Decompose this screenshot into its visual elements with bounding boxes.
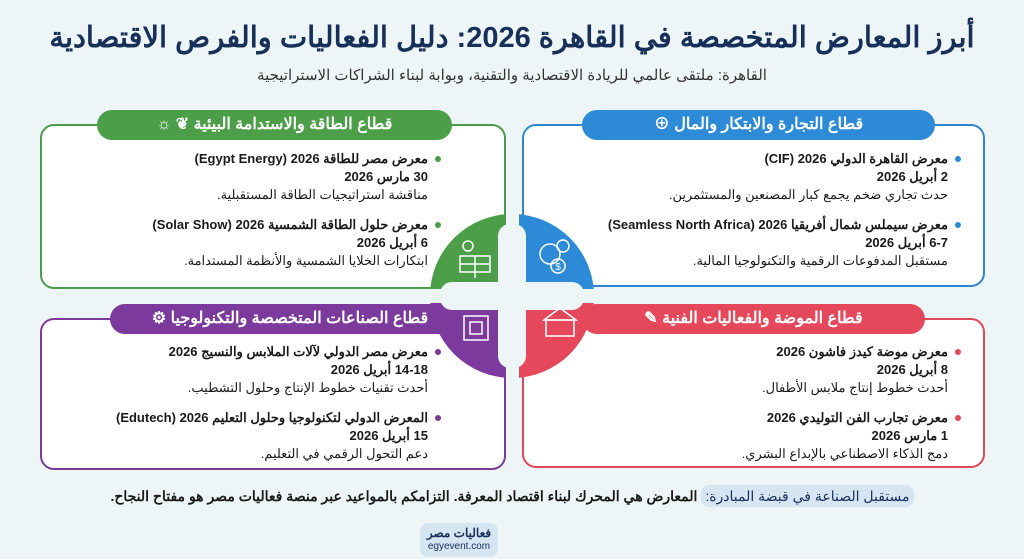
text: energy items: معرض مصر للطاقة 2026 (Egypt Energy) <box>195 151 428 166</box>
heading: fashion: قطاع الموضة والفعاليات الفنية ✎ <box>644 310 863 327</box>
panel: fashion (red) <box>522 318 985 468</box>
text: energy items <box>152 151 441 268</box>
panel: energy (green) <box>40 124 506 289</box>
text: industries items: معرض مصر الدولي لآلات الملابس والنسيج 2026 <box>169 344 428 359</box>
heading: industries <box>110 304 470 334</box>
text: fashion items <box>742 344 961 462</box>
text: industries items: 14-18 أبريل 2026 <box>331 362 428 377</box>
footer text: مستقبل الصناعة في قبضة المبادرة: المعارض هي المحرك لبناء اقتصاد المعرفة. التزامكم بالمواعيد عبر منصة فعاليات مصر هو مفتاح النجاح. <box>110 488 910 504</box>
text: trade items: حدث تجاري ضخم يجمع كبار المصنعين والمستثمرين. <box>669 187 948 202</box>
heading: energy: قطاع الطاقة والاستدامة البيئية ❦ ☼ <box>157 116 392 133</box>
text: trade items: 6-7 أبريل 2026 <box>865 235 948 250</box>
heading: industries: قطاع الصناعات المتخصصة والتكنولوجيا ⚙ <box>152 310 428 327</box>
text: industries items: دعم التحول الرقمي في التعليم. <box>261 446 428 461</box>
panel: trade (blue) <box>522 124 985 287</box>
icon: gears dollar <box>540 240 569 273</box>
text: energy items: ابتكارات الخلايا الشمسية والأنظمة المستدامة. <box>184 253 428 268</box>
title: أبرز المعارض المتخصصة في القاهرة 2026: دليل الفعاليات والفرص الاقتصادية <box>49 22 975 54</box>
panel: industries (purple) <box>40 318 506 470</box>
chart: center quadrant wheel <box>430 214 594 378</box>
text: fashion items: أحدث خطوط إنتاج ملابس الأطفال. <box>762 380 948 395</box>
text: energy items: مناقشة استراتيجيات الطاقة المستقبلية. <box>217 187 428 202</box>
text: energy items: معرض حلول الطاقة الشمسية 2026 (Solar Show) <box>152 217 428 232</box>
heading: trade: قطاع التجارة والابتكار والمال ⊕ <box>654 116 863 133</box>
heading: energy <box>97 110 452 140</box>
text: industries items <box>116 344 441 462</box>
text: fashion items: 8 أبريل 2026 <box>877 362 948 377</box>
heading: trade <box>582 110 935 140</box>
text: industries items: 15 أبريل 2026 <box>350 428 428 443</box>
text: trade items: 2 أبريل 2026 <box>877 169 948 184</box>
text: energy items: 6 أبريل 2026 <box>357 235 428 250</box>
text: fashion items: معرض موضة كيدز فاشون 2026 <box>776 344 948 359</box>
text: industries items: المعرض الدولي لتكنولوجيا وحلول التعليم 2026 (Edutech) <box>116 410 428 425</box>
text: energy items: 30 مارس 2026 <box>344 169 428 184</box>
icon: chip <box>464 316 488 340</box>
text: trade items: مستقبل المدفوعات الرقمية والتكنولوجيا المالية. <box>693 253 948 268</box>
icon: hanger <box>544 304 576 336</box>
text: trade items: معرض سيملس شمال أفريقيا 2026 (Seamless North Africa) <box>608 217 948 232</box>
logo: egyevent.com <box>428 541 490 552</box>
subtitle: القاهرة: ملتقى عالمي للريادة الاقتصادية والتقنية، وبوابة لبناء الشراكات الاستراتيجية <box>257 67 767 84</box>
text: fashion items: 1 مارس 2026 <box>872 428 948 443</box>
text: fashion items: دمج الذكاء الاصطناعي بالإبداع البشري. <box>742 446 948 461</box>
icon: gears dollar: $ <box>555 262 561 273</box>
text: fashion items: معرض تجارب الفن التوليدي 2026 <box>767 410 948 425</box>
logo <box>420 523 498 557</box>
text: trade items <box>608 151 961 268</box>
text: trade items: معرض القاهرة الدولي 2026 (CIF) <box>764 151 948 166</box>
icon: solar panel <box>460 241 490 278</box>
logo: فعاليات مصر <box>427 526 491 540</box>
text: industries items: أحدث تقنيات خطوط الإنتاج وحلول التشطيب. <box>188 380 428 395</box>
heading: fashion <box>582 304 925 334</box>
